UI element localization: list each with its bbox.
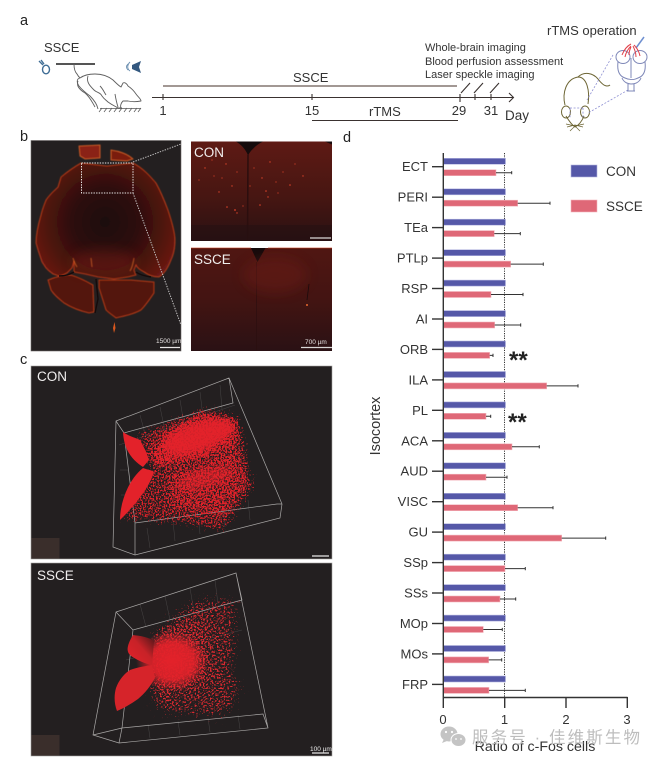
day 1: 1 (159, 103, 167, 118)
scale 700 um: 700 µm (305, 339, 327, 346)
dotted zoom lines (133, 144, 181, 325)
rTMS duration line (312, 120, 458, 122)
axes (443, 153, 628, 708)
legend: SSCE (606, 199, 643, 214)
region AI: AI (416, 312, 428, 326)
region ECT (402, 158, 512, 176)
region PTLp: PTLp (397, 251, 428, 266)
region PERI (398, 189, 550, 206)
region MOp (400, 615, 506, 632)
CON label: CON (194, 145, 224, 160)
watermark (440, 726, 640, 747)
region ORB (400, 341, 506, 358)
region PL (412, 402, 506, 419)
x tick 2: 2 (562, 712, 570, 727)
region ORB: ORB (400, 342, 428, 357)
SSCE 3D view (31, 563, 332, 756)
imaging time pointers (461, 83, 499, 93)
imaging assessments list: Laser speckle imaging (425, 69, 534, 81)
region MOs (401, 646, 506, 663)
inset: CON micrograph (191, 142, 332, 241)
SSCE label: SSCE (37, 568, 74, 583)
red c-Fos cloud (115, 597, 243, 717)
region RSP: RSP (401, 281, 428, 296)
x tick 3: 3 (623, 712, 631, 727)
region SSp (403, 554, 525, 572)
panel letter d: d (343, 130, 351, 146)
x axis title: Ratio of c-Fos cells (475, 739, 595, 755)
day 15: 15 (305, 103, 319, 118)
bounding box (113, 378, 282, 555)
SSCE label: SSCE (194, 252, 231, 267)
region TEa: TEa (404, 220, 429, 235)
region SSs: SSs (404, 586, 428, 600)
panel letter c: c (20, 352, 27, 368)
significance PL: ** (508, 409, 527, 436)
panel c: 3D whole-brain c-Fos rendering (20, 352, 332, 756)
bounding box (93, 573, 268, 743)
region FRP (402, 676, 525, 693)
panel letter a: a (20, 13, 29, 29)
dotted region of interest (82, 163, 133, 193)
region SSs (404, 585, 516, 602)
region GU: GU (408, 525, 428, 540)
imaging assessments list: Whole-brain imaging (425, 42, 526, 54)
watermark text: 服务号 · 佳维斯生物 (472, 728, 640, 747)
dashed zoom lines mouse to brain (570, 55, 628, 118)
region MOp: MOp (400, 616, 428, 631)
region ECT: ECT (402, 159, 428, 174)
SSCE duration line (163, 85, 457, 87)
CON label: CON (37, 369, 67, 384)
icon: mouse from above (562, 73, 610, 131)
whole-section micrograph (31, 140, 181, 351)
region ACA: ACA (401, 433, 428, 448)
x tick 1: 1 (501, 712, 508, 727)
scale bar (310, 237, 331, 239)
imaging assessments list (425, 42, 563, 81)
red c-Fos cloud (120, 407, 254, 532)
icon: brain with coil (616, 37, 647, 91)
day 31: 31 (484, 103, 498, 118)
c-Fos speckles (198, 159, 304, 214)
region VISC (398, 493, 553, 511)
panel a: experiment timeline (20, 13, 647, 131)
rTMS operation heading: rTMS operation (547, 23, 637, 38)
x tick 0: 0 (439, 712, 447, 727)
region FRP: FRP (402, 677, 428, 692)
scale bar (312, 555, 329, 557)
SSCE stimulus label: SSCE (44, 40, 80, 55)
region ACA (401, 432, 539, 450)
y axis title: Isocortex (368, 396, 384, 455)
region AI (416, 311, 521, 328)
region SSp: SSp (403, 555, 428, 570)
CON 3D view (31, 366, 332, 559)
region GU (408, 524, 606, 541)
bar above the rat (56, 63, 95, 65)
significance ORB: ** (509, 347, 528, 374)
icon: rat on grid floor (74, 64, 141, 109)
panel d: bar chart of c-Fos ratio by region (343, 130, 643, 755)
Day axis label: Day (505, 108, 529, 123)
region VISC: VISC (398, 494, 428, 509)
icon: light ring (39, 60, 50, 74)
region AUD (401, 463, 507, 480)
panel b: brain section histology (20, 129, 332, 351)
reference line at 1 (504, 153, 506, 697)
SSCE duration label: SSCE (293, 70, 329, 85)
day 29: 29 (452, 103, 466, 118)
scale 100 um: 100 µm (310, 746, 332, 753)
region AUD: AUD (401, 464, 428, 479)
timeline axis arrow (152, 93, 514, 102)
icon: chat bubbles (440, 726, 466, 746)
inset: SSCE micrograph (191, 248, 332, 351)
panel letter b: b (20, 129, 28, 145)
imaging assessments list: Blood perfusion assessment (425, 56, 563, 68)
region PL: PL (412, 403, 428, 418)
scale bar (160, 346, 180, 348)
icon: speaker (126, 61, 141, 73)
region PTLp (397, 250, 543, 267)
legend (571, 164, 643, 214)
region MOs: MOs (401, 646, 428, 661)
region ILA: ILA (408, 372, 428, 387)
region ILA (408, 372, 578, 389)
region RSP (401, 280, 523, 298)
rTMS label: rTMS (369, 104, 401, 119)
region TEa (404, 219, 520, 237)
grid floor (99, 108, 141, 112)
scale bar (312, 752, 329, 754)
legend: CON (606, 164, 636, 179)
scale 1500 um: 1500 µm (156, 338, 181, 345)
scale bar (301, 346, 332, 348)
region PERI: PERI (398, 190, 428, 205)
